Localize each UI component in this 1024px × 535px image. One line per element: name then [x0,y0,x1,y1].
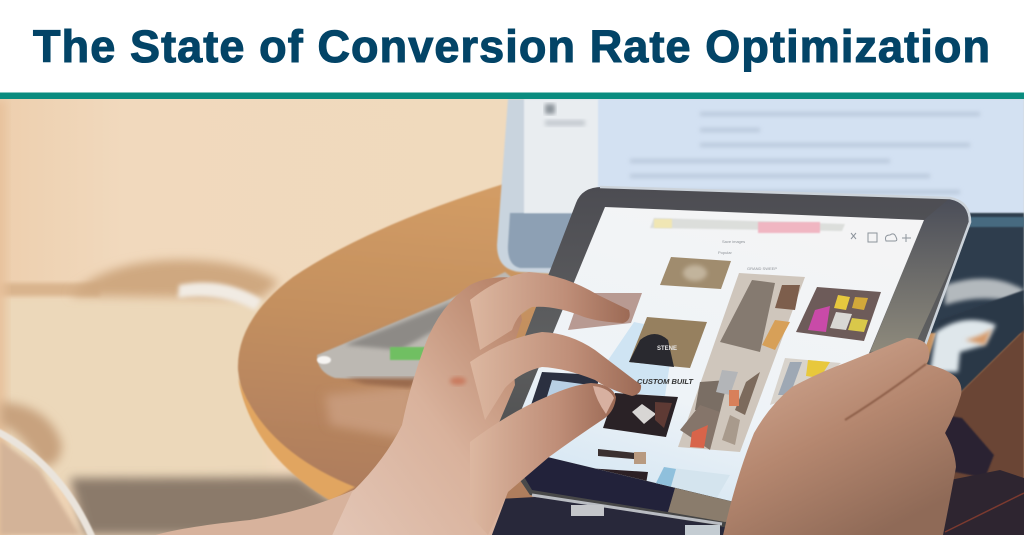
band: light blue section [608,322,670,396]
tablet [489,187,970,535]
tiny interface labels: Popular [718,250,732,255]
tiny interface labels: Save images [722,239,745,244]
tiny interface labels: GRAND SWEEP [747,266,777,271]
app top bar [650,218,845,231]
tiny interface labels [718,239,777,271]
laptop screen sidebar [524,99,600,213]
forearm [140,488,430,535]
palm [330,277,522,535]
tile: gold photo [660,257,731,289]
knuckle redness [450,377,466,385]
tile: black diamonds [603,393,678,437]
tile: brown stener [629,317,707,368]
table reflection [325,385,415,440]
finger: ring [470,383,616,535]
tablet bottom bezel navy [524,458,675,512]
tile: dark bottom [582,468,648,490]
round wooden table [237,184,1024,499]
right hand [722,338,961,535]
phone on table [945,415,994,478]
white cable at lower left [0,432,92,535]
tile: pink photo [568,293,642,330]
tile: clothing collage [678,273,805,452]
tablet body [489,187,970,528]
dark lower right surface [935,470,1024,535]
tile: blue bottom [650,467,730,501]
tile: colourful artwork [796,287,881,341]
finger: middle [470,332,641,420]
blurred chair [0,100,279,535]
finger: index [470,272,630,350]
floor shadow [70,477,345,535]
teal divider bar [0,92,1024,100]
left hand [140,272,641,535]
title: The State of Conversion Rate Optimization [33,21,990,72]
dark surface below tablet [492,497,725,535]
text: custom built: CUSTOM BUILT [637,377,694,386]
tile: lower right photos [770,358,841,405]
red cable [945,493,1024,532]
remote on table [317,272,540,388]
tablet bottom bezel olive [668,488,732,522]
laptop keyboard dark base [930,212,1024,334]
toolbar icons [851,233,911,242]
laptop [497,99,1024,333]
tablet screen [506,207,924,518]
tile: left dark frame [530,372,600,413]
dark table area at right [945,330,1024,480]
fingernail: ring [593,386,614,414]
blurred list rows [630,112,980,194]
text: STENER: STENE [657,346,677,352]
tablet stand feet [571,505,604,516]
table rim [238,378,355,501]
laptop frame [497,99,1024,300]
hammer [598,449,645,460]
tablet right bezel [870,220,968,352]
silver rim [600,187,970,345]
dark notebook and stickers at right [925,290,1024,395]
laptop screen main [598,99,1024,213]
